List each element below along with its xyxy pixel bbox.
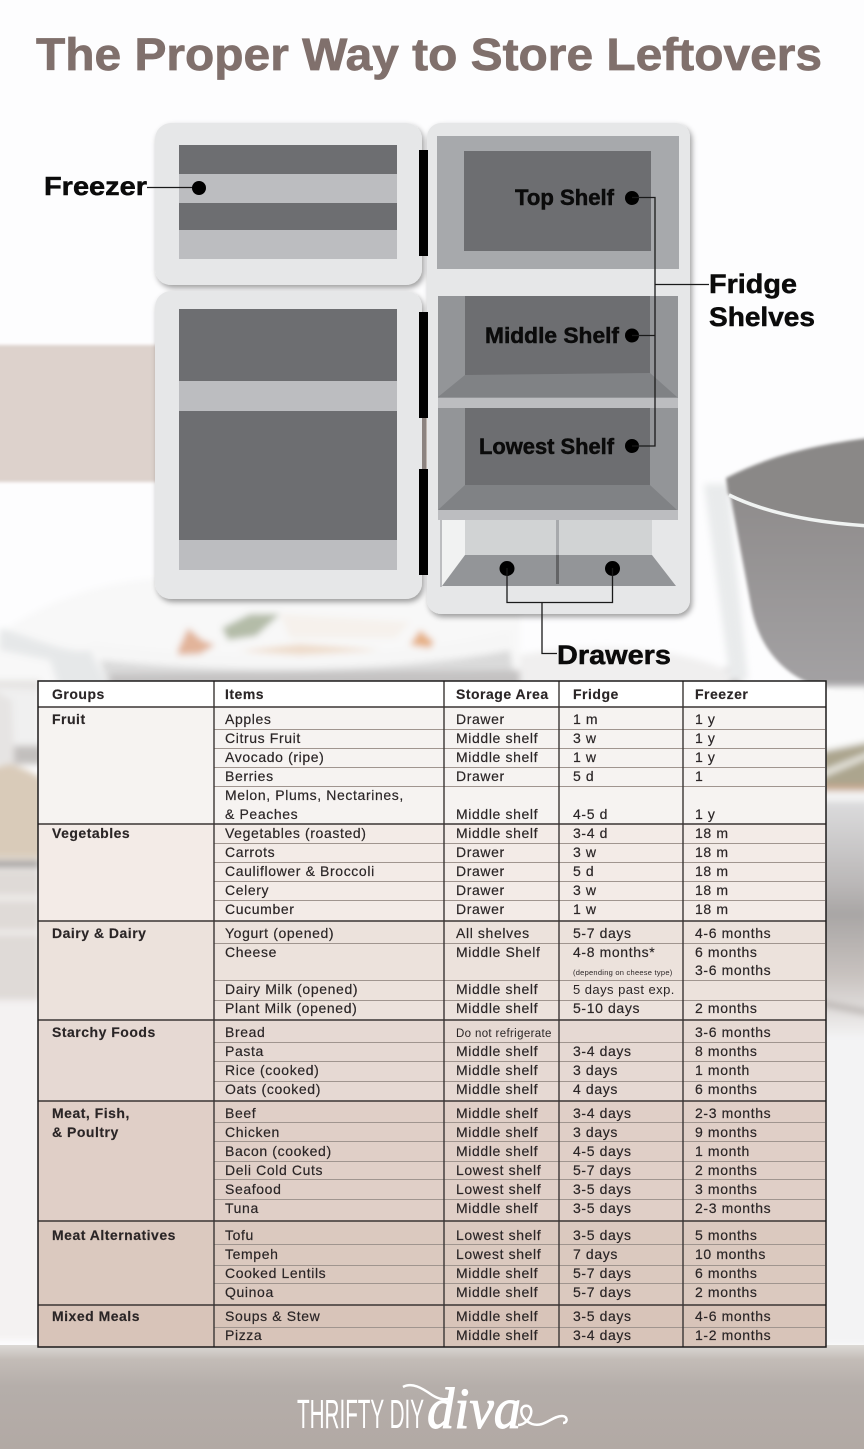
- group: fruit: Middle shelf: [456, 730, 538, 746]
- group: vegetables: [38, 824, 826, 921]
- table header: Storage Area: [456, 686, 549, 702]
- group: mixed meals: 4-6 months: [695, 1308, 771, 1324]
- group: dairy: [38, 921, 826, 1020]
- group: dairy: 3-6 months: [695, 962, 771, 978]
- middle shelf: [438, 296, 678, 408]
- group: vegetables: Middle shelf: [456, 825, 538, 841]
- fridge diagram: [155, 123, 690, 614]
- group: starchy foods: 3-6 months: [695, 1024, 771, 1040]
- group: meat alternatives: Meat Alternatives: [52, 1227, 176, 1243]
- group: meat alternatives: Middle shelf: [456, 1284, 538, 1300]
- group: meat, fish, poultry: 1 month: [695, 1143, 750, 1159]
- group: meat, fish, poultry: 9 months: [695, 1124, 758, 1140]
- group: starchy foods: 6 months: [695, 1081, 758, 1097]
- group: vegetables: 18 m: [695, 825, 729, 841]
- group: vegetables: 1 w: [573, 901, 597, 917]
- group: mixed meals: Mixed Meals: [52, 1308, 140, 1324]
- group: starchy foods: Middle shelf: [456, 1043, 538, 1059]
- lowest shelf: [438, 408, 678, 520]
- group: fruit: Citrus Fruit: [225, 730, 301, 746]
- group: fruit: 1 w: [573, 749, 597, 765]
- group: meat alternatives: 3-5 days: [573, 1227, 632, 1243]
- group: dairy: 5 days past exp.: [573, 982, 675, 997]
- group: vegetables: Carrots: [225, 844, 275, 860]
- table header: [38, 681, 826, 707]
- group: meat, fish, poultry: 2-3 months: [695, 1200, 771, 1216]
- group: meat alternatives: Lowest shelf: [456, 1227, 541, 1243]
- group: vegetables: 18 m: [695, 882, 729, 898]
- group: dairy: Middle shelf: [456, 981, 538, 997]
- group: fruit: 1 m: [573, 711, 598, 727]
- group: meat, fish, poultry: 3 months: [695, 1181, 758, 1197]
- group: meat, fish, poultry: & Poultry: [52, 1124, 119, 1140]
- group: fruit: Drawer: [456, 768, 505, 784]
- group: meat alternatives: Cooked Lentils: [225, 1265, 326, 1281]
- group: vegetables: Cucumber: [225, 901, 295, 917]
- group: meat, fish, poultry: Deli Cold Cuts: [225, 1162, 323, 1178]
- group: dairy: Yogurt (opened): [225, 925, 334, 941]
- group: vegetables: 18 m: [695, 863, 729, 879]
- top shelf: [437, 136, 679, 269]
- group: meat, fish, poultry: Bacon (cooked): [225, 1143, 332, 1159]
- group: meat, fish, poultry: 3-4 days: [573, 1105, 632, 1121]
- group: fruit: Berries: [225, 768, 274, 784]
- group: mixed meals: [38, 1305, 826, 1347]
- group: meat, fish, poultry: Meat, Fish,: [52, 1105, 130, 1121]
- group: fruit: 3 w: [573, 730, 597, 746]
- lower door: [155, 291, 422, 599]
- table header: Fridge: [573, 686, 619, 702]
- group: meat, fish, poultry: [38, 1101, 826, 1221]
- group: vegetables: 3 w: [573, 844, 597, 860]
- group: starchy foods: Oats (cooked): [225, 1081, 321, 1097]
- group: dairy: 4-6 months: [695, 925, 771, 941]
- logo: diva: [427, 1376, 521, 1441]
- logo: THRIFTY DIY: [297, 1391, 424, 1437]
- group: fruit: Drawer: [456, 711, 505, 727]
- table header: Groups: [52, 686, 105, 702]
- group: fruit: [38, 707, 826, 824]
- callout: drawers: Drawers: [557, 640, 671, 670]
- group: mixed meals: Middle shelf: [456, 1308, 538, 1324]
- group: meat, fish, poultry: 4-5 days: [573, 1143, 632, 1159]
- door handles: [419, 150, 428, 575]
- group: fruit: Middle shelf: [456, 749, 538, 765]
- group: meat, fish, poultry: 3-5 days: [573, 1181, 632, 1197]
- group: fruit: 1 y: [695, 806, 716, 822]
- group: dairy: 5-7 days: [573, 925, 632, 941]
- group: starchy foods: Pasta: [225, 1043, 264, 1059]
- table header: Freezer: [695, 686, 748, 702]
- callout: fridge shelves: Fridge: [709, 269, 797, 299]
- group: starchy foods: Starchy Foods: [52, 1024, 156, 1040]
- group: dairy: Middle shelf: [456, 1000, 538, 1016]
- group: mixed meals: 3-5 days: [573, 1308, 632, 1324]
- group: meat alternatives: Tempeh: [225, 1246, 279, 1262]
- group: meat, fish, poultry: Seafood: [225, 1181, 282, 1197]
- group: starchy foods: Rice (cooked): [225, 1062, 319, 1078]
- callout: fridge shelves: Lowest Shelf: [479, 434, 615, 459]
- logo: [297, 1376, 567, 1441]
- group: dairy: Plant Milk (opened): [225, 1000, 357, 1016]
- group: vegetables: 5 d: [573, 863, 594, 879]
- group: meat alternatives: Tofu: [225, 1227, 254, 1243]
- group: vegetables: 3-4 d: [573, 825, 608, 841]
- group: vegetables: Vegetables: [52, 825, 130, 841]
- group: mixed meals: Middle shelf: [456, 1327, 538, 1343]
- group: meat alternatives: 6 months: [695, 1265, 758, 1281]
- callout: drawers: [500, 561, 671, 670]
- group: dairy: Dairy & Dairy: [52, 925, 146, 941]
- group: fruit: Fruit: [52, 711, 86, 727]
- callout: freezer: [44, 171, 206, 201]
- callout: fridge shelves: Top Shelf: [515, 185, 615, 210]
- group: meat, fish, poultry: 3-5 days: [573, 1200, 632, 1216]
- callout: fridge shelves: Middle Shelf: [485, 323, 620, 348]
- group: meat alternatives: 5-7 days: [573, 1265, 632, 1281]
- group: fruit: 4-5 d: [573, 806, 608, 822]
- group: vegetables: Drawer: [456, 863, 505, 879]
- group: meat alternatives: 5-7 days: [573, 1284, 632, 1300]
- group: fruit: Apples: [225, 711, 272, 727]
- group: fruit: Avocado (ripe): [225, 749, 324, 765]
- group: meat, fish, poultry: Beef: [225, 1105, 256, 1121]
- group: fruit: 1: [695, 768, 703, 784]
- group: meat, fish, poultry: Lowest shelf: [456, 1162, 541, 1178]
- group: vegetables: 3 w: [573, 882, 597, 898]
- callout: freezer: Freezer: [44, 171, 147, 201]
- storage table: [38, 681, 826, 1347]
- group: dairy: Dairy Milk (opened): [225, 981, 358, 997]
- group: starchy foods: 1 month: [695, 1062, 750, 1078]
- freezer door: [155, 123, 422, 285]
- group: starchy foods: Do not refrigerate: [456, 1028, 552, 1040]
- group: fruit: Middle shelf: [456, 806, 538, 822]
- group: fruit: 1 y: [695, 711, 716, 727]
- group: meat, fish, poultry: Middle shelf: [456, 1105, 538, 1121]
- group: vegetables: Cauliflower & Broccoli: [225, 863, 375, 879]
- group: dairy: 6 months: [695, 944, 758, 960]
- group: starchy foods: Bread: [225, 1024, 265, 1040]
- group: mixed meals: 3-4 days: [573, 1327, 632, 1343]
- group: vegetables: 18 m: [695, 844, 729, 860]
- group: fruit: 1 y: [695, 730, 716, 746]
- group: meat, fish, poultry: Lowest shelf: [456, 1181, 541, 1197]
- group: fruit: 5 d: [573, 768, 594, 784]
- group: meat, fish, poultry: 3 days: [573, 1124, 618, 1140]
- group: meat, fish, poultry: Chicken: [225, 1124, 280, 1140]
- group: fruit: Melon, Plums, Nectarines,: [225, 787, 404, 803]
- table header: Items: [225, 686, 264, 702]
- group: starchy foods: Middle shelf: [456, 1062, 538, 1078]
- group: meat alternatives: 2 months: [695, 1284, 758, 1300]
- group: vegetables: Vegetables (roasted): [225, 825, 367, 841]
- callout: fridge shelves: [479, 185, 815, 459]
- group: starchy foods: 3 days: [573, 1062, 618, 1078]
- table grid lines: [38, 681, 826, 1347]
- group: meat alternatives: [38, 1221, 826, 1305]
- group: dairy: Cheese: [225, 944, 277, 960]
- group: starchy foods: 4 days: [573, 1081, 618, 1097]
- group: fruit: 1 y: [695, 749, 716, 765]
- group: mixed meals: Soups & Stew: [225, 1308, 321, 1324]
- group: meat alternatives: Quinoa: [225, 1284, 274, 1300]
- group: vegetables: Drawer: [456, 901, 505, 917]
- callout: fridge shelves: Shelves: [709, 302, 815, 332]
- group: dairy: 4-8 months*: [573, 944, 655, 960]
- group: mixed meals: 1-2 months: [695, 1327, 771, 1343]
- group: meat alternatives: 7 days: [573, 1246, 618, 1262]
- group: starchy foods: [38, 1020, 826, 1101]
- title: The Proper Way to Store Leftovers: [36, 29, 822, 80]
- group: starchy foods: Middle shelf: [456, 1081, 538, 1097]
- group: vegetables: 18 m: [695, 901, 729, 917]
- group: meat alternatives: 10 months: [695, 1246, 766, 1262]
- group: vegetables: Drawer: [456, 882, 505, 898]
- drawers: [440, 520, 676, 587]
- group: meat, fish, poultry: 2-3 months: [695, 1105, 771, 1121]
- group: dairy: (depending on cheese type): [573, 968, 673, 977]
- group: meat, fish, poultry: Middle shelf: [456, 1143, 538, 1159]
- group: meat, fish, poultry: Middle shelf: [456, 1124, 538, 1140]
- group: vegetables: Celery: [225, 882, 269, 898]
- group: meat, fish, poultry: Tuna: [225, 1200, 259, 1216]
- group: starchy foods: 8 months: [695, 1043, 758, 1059]
- group: meat alternatives: 5 months: [695, 1227, 758, 1243]
- group: meat alternatives: Lowest shelf: [456, 1246, 541, 1262]
- group: meat, fish, poultry: Middle shelf: [456, 1200, 538, 1216]
- group: meat alternatives: Middle shelf: [456, 1265, 538, 1281]
- group: dairy: 2 months: [695, 1000, 758, 1016]
- group: starchy foods: 3-4 days: [573, 1043, 632, 1059]
- group: dairy: All shelves: [456, 925, 530, 941]
- group: dairy: Middle Shelf: [456, 944, 540, 960]
- group: mixed meals: Pizza: [225, 1327, 262, 1343]
- group: meat, fish, poultry: 2 months: [695, 1162, 758, 1178]
- group: fruit: & Peaches: [225, 806, 298, 822]
- group: dairy: 5-10 days: [573, 1000, 640, 1016]
- fridge interior: [427, 123, 690, 614]
- group: vegetables: Drawer: [456, 844, 505, 860]
- group: meat, fish, poultry: 5-7 days: [573, 1162, 632, 1178]
